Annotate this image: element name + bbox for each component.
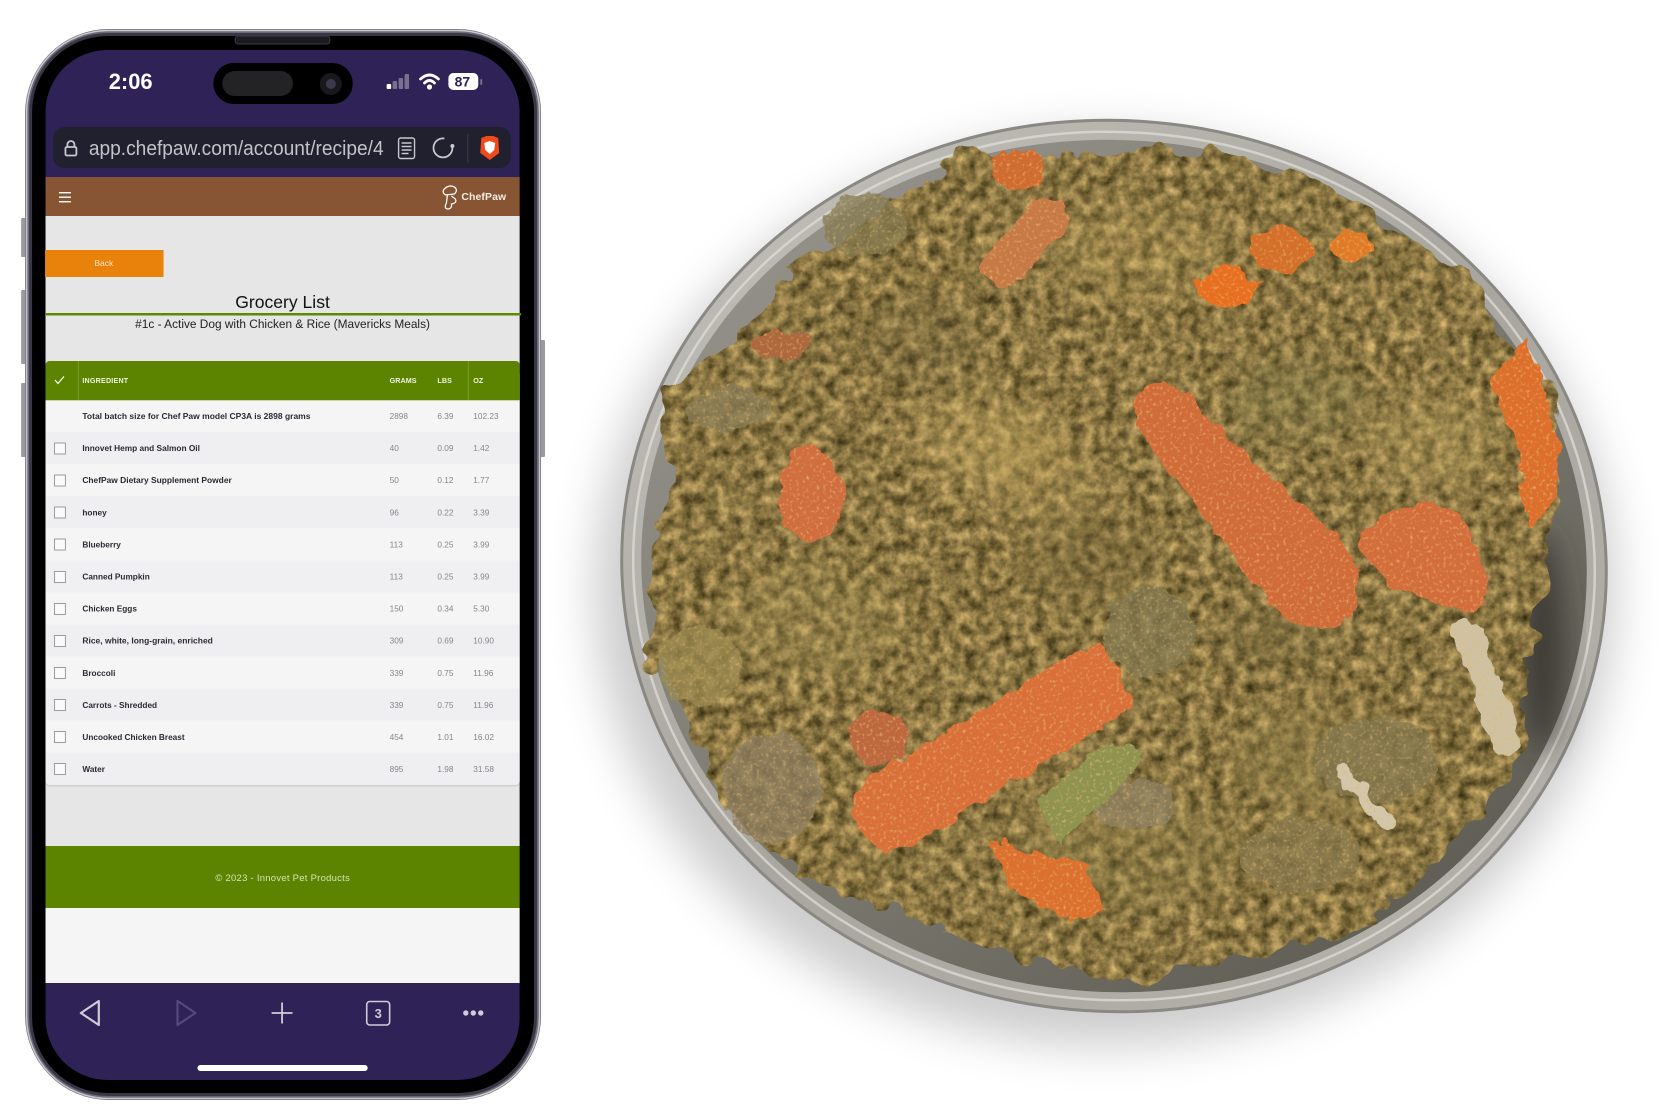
table row: hemp oil: Innovet Hemp and Salmon Oil bbox=[82, 444, 200, 453]
table row: chicken: 1.01 bbox=[437, 733, 454, 742]
table row: blueberry: 0.25 bbox=[437, 540, 454, 549]
table row: total: 102.23 bbox=[473, 412, 499, 421]
table row: blueberry: 113 bbox=[390, 540, 403, 549]
url text: app.chefpaw.com/account/recipe/4 bbox=[89, 138, 384, 160]
table row: pumpkin: Canned Pumpkin bbox=[82, 573, 150, 582]
right carrot bbox=[1360, 504, 1485, 609]
table row: blueberry: Blueberry bbox=[82, 540, 121, 549]
table row: supplement: 1.77 bbox=[473, 476, 490, 485]
left carrot bbox=[778, 448, 844, 540]
table row: total bbox=[46, 400, 520, 432]
table row: broccoli: 0.75 bbox=[437, 669, 454, 678]
shaded bowl interior bbox=[1520, 530, 1564, 750]
signal bars bbox=[387, 74, 409, 89]
table row: blueberry bbox=[46, 528, 520, 560]
table row: water bbox=[46, 752, 520, 785]
table row: honey: honey bbox=[82, 508, 107, 517]
table row: carrots: 339 bbox=[390, 701, 404, 710]
reload icon bbox=[434, 138, 454, 157]
table row: chicken: Uncooked Chicken Breast bbox=[82, 733, 185, 742]
ChefPaw logo: ChefPaw bbox=[461, 192, 507, 203]
bright chunk bbox=[1194, 263, 1261, 308]
food mass bbox=[648, 145, 1563, 981]
hamburger menu icon bbox=[59, 192, 71, 202]
table header: INGREDIENT bbox=[82, 377, 129, 385]
table row: chicken bbox=[46, 720, 520, 752]
side buttons bbox=[21, 218, 545, 457]
page background bbox=[45, 216, 521, 846]
celery piece bbox=[1036, 741, 1144, 844]
table row: pumpkin: 113 bbox=[390, 573, 403, 582]
new tab icon bbox=[272, 1002, 293, 1024]
table row: water: Water bbox=[82, 765, 106, 774]
battery: 87 bbox=[455, 73, 470, 90]
table row: pumpkin bbox=[46, 560, 520, 592]
reader icon bbox=[399, 138, 415, 158]
status time: 2:06 bbox=[109, 69, 153, 94]
dynamic island bbox=[213, 63, 353, 104]
tabs icon: 3 bbox=[375, 1006, 382, 1021]
chicken pieces bbox=[1340, 632, 1505, 825]
table row: chicken: 16.02 bbox=[473, 733, 494, 742]
table row: total: 2898 bbox=[390, 412, 408, 421]
bowl rim bbox=[590, 86, 1638, 1046]
table row: eggs: 150 bbox=[390, 605, 404, 614]
brave icon bbox=[480, 136, 499, 160]
table row: carrots bbox=[46, 688, 520, 720]
address bar bbox=[53, 127, 511, 168]
table row: hemp oil bbox=[46, 432, 520, 464]
table row: eggs: Chicken Eggs bbox=[82, 605, 137, 614]
table row: broccoli bbox=[46, 656, 520, 688]
table row: chicken: 454 bbox=[390, 733, 404, 742]
long centre carrot bbox=[1134, 383, 1359, 631]
phone bbox=[21, 29, 545, 1100]
footer bar bbox=[45, 846, 521, 908]
back button: Back bbox=[94, 258, 114, 268]
table row: supplement: 50 bbox=[390, 476, 399, 485]
table row: supplement: ChefPaw Dietary Supplement Powder bbox=[82, 476, 233, 485]
table header: LBS bbox=[437, 377, 452, 385]
big lower carrot bbox=[892, 692, 1085, 812]
table row: blueberry: 3.99 bbox=[473, 540, 490, 549]
top carrots bbox=[990, 149, 1046, 191]
title divider bbox=[45, 313, 521, 316]
table row: carrots: Carrots - Shredded bbox=[82, 701, 157, 710]
phone frame bbox=[25, 29, 541, 1100]
home indicator bbox=[197, 1065, 368, 1071]
table row: honey: 3.39 bbox=[473, 508, 490, 517]
bottom chunk bbox=[991, 837, 1106, 921]
ChefPaw logo bbox=[443, 186, 507, 209]
carrots bbox=[755, 149, 1559, 921]
table row: total: 6.39 bbox=[437, 412, 454, 421]
table row: eggs bbox=[46, 592, 520, 624]
browser forward icon bbox=[177, 1001, 195, 1025]
table row: supplement: 0.12 bbox=[437, 476, 454, 485]
back button bbox=[45, 250, 164, 277]
table row: pumpkin: 0.25 bbox=[437, 573, 454, 582]
table header: GRAMS bbox=[390, 377, 417, 385]
table row: honey: 0.22 bbox=[437, 508, 454, 517]
screen bbox=[45, 50, 521, 1080]
table row: broccoli: 339 bbox=[390, 669, 404, 678]
table row: water: 895 bbox=[390, 765, 404, 774]
table row: water: 1.98 bbox=[437, 765, 454, 774]
battery bbox=[448, 73, 482, 90]
table row: rice: 0.69 bbox=[437, 637, 454, 646]
table row: carrots: 0.75 bbox=[437, 701, 454, 710]
more icon bbox=[463, 1010, 483, 1016]
browser back icon bbox=[81, 1001, 99, 1025]
table row: hemp oil: 1.42 bbox=[473, 444, 490, 453]
table row: rice bbox=[46, 624, 520, 656]
bowl of dog food bbox=[590, 86, 1638, 1046]
table row: total: Total batch size for Chef Paw model CP3A is 2898 grams bbox=[82, 412, 311, 421]
food colour shading bbox=[720, 200, 1490, 910]
bowl drop shadow bbox=[595, 135, 1615, 1045]
table row: rice: Rice, white, long-grain, enriched bbox=[82, 637, 213, 646]
meat chunks bbox=[658, 193, 1437, 891]
page header bar bbox=[45, 177, 521, 216]
page title: Grocery List bbox=[235, 292, 330, 312]
recipe subtitle: #1c - Active Dog with Chicken & Rice (Mavericks Meals) bbox=[135, 317, 430, 331]
table row: carrots: 11.96 bbox=[473, 701, 494, 710]
table row: broccoli: Broccoli bbox=[82, 669, 115, 678]
table row: hemp oil: 40 bbox=[390, 444, 399, 453]
table row: pumpkin: 3.99 bbox=[473, 573, 490, 582]
lock icon bbox=[65, 141, 76, 156]
table row: broccoli: 11.96 bbox=[473, 669, 494, 678]
table header: OZ bbox=[473, 377, 484, 385]
tabs icon bbox=[367, 1002, 390, 1025]
right edge carrot bbox=[1490, 337, 1559, 529]
table row: hemp oil: 0.09 bbox=[437, 444, 454, 453]
footer text: © 2023 - Innovet Pet Products bbox=[215, 873, 350, 884]
table row: honey: 96 bbox=[390, 508, 399, 517]
ingredient table bbox=[46, 361, 520, 786]
table row: rice: 309 bbox=[390, 637, 404, 646]
table row: water: 31.58 bbox=[473, 765, 494, 774]
table header bbox=[46, 361, 520, 400]
table row: supplement bbox=[46, 464, 520, 496]
blank page area bbox=[45, 908, 521, 983]
table row: rice: 10.90 bbox=[473, 637, 494, 646]
wifi icon bbox=[421, 75, 438, 88]
table shadow bbox=[46, 370, 520, 786]
table row: eggs: 5.30 bbox=[473, 605, 490, 614]
table row: eggs: 0.34 bbox=[437, 605, 454, 614]
table row: honey bbox=[46, 496, 520, 528]
